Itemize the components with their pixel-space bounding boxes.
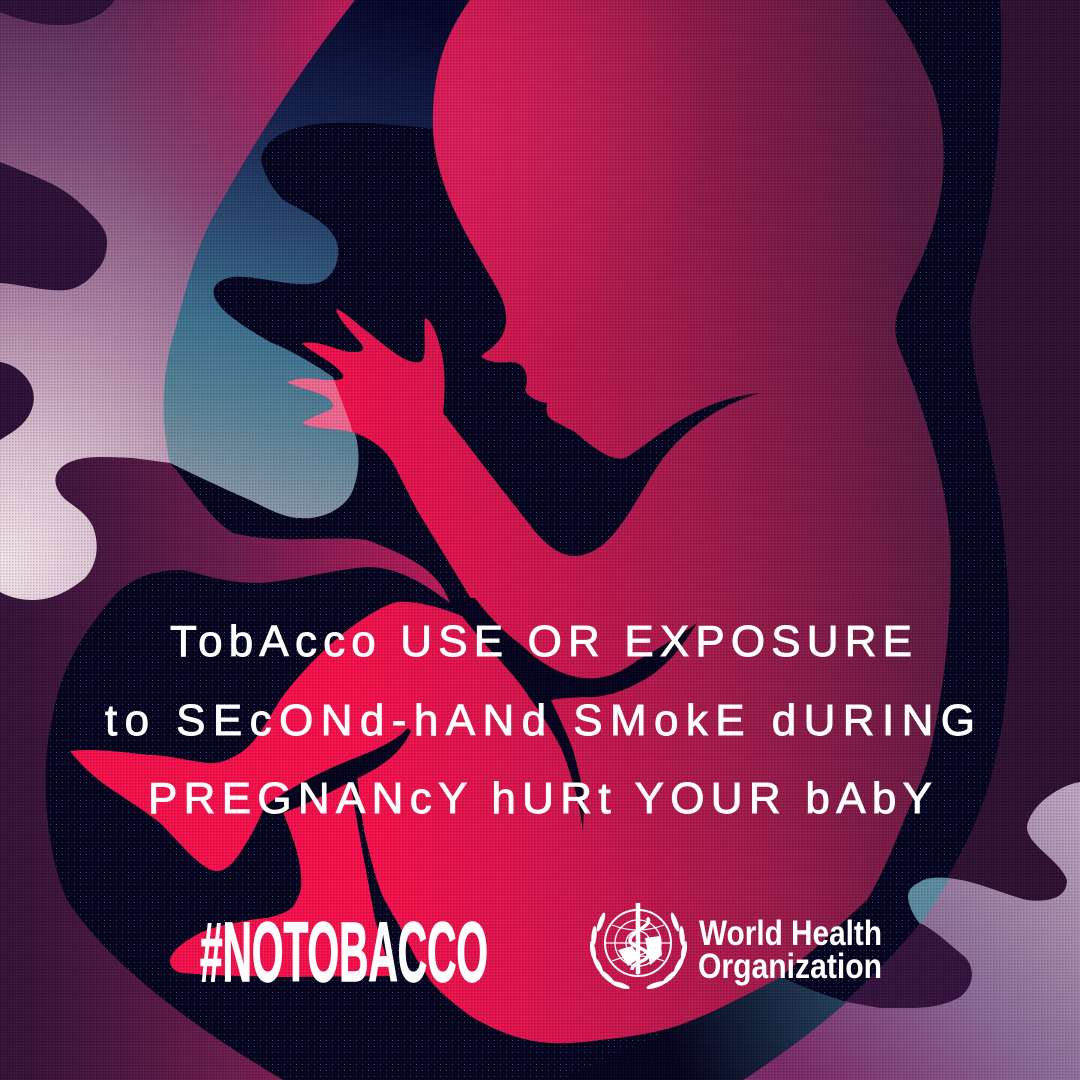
WHO wordmark xyxy=(698,914,882,986)
headline text xyxy=(105,617,975,823)
WHO wordmark: Organization xyxy=(698,947,882,986)
fingers overlapping lens xyxy=(287,378,353,432)
WHO wordmark: World Health xyxy=(699,914,882,953)
headline text: to SEcONd-hANd SMokE dURING xyxy=(105,696,975,745)
poster illustration: #NOTOBACCO xyxy=(200,905,488,999)
dark contour lines on fetus body xyxy=(263,598,697,832)
headline text: TobAcco USE OR EXPOSURE xyxy=(170,617,912,666)
fetus silhouette xyxy=(70,0,951,1043)
teal overlap of smoke on the womb xyxy=(560,878,949,1080)
maroon smoke blob, lower left xyxy=(0,457,460,1080)
blue amniotic lens xyxy=(164,0,470,518)
icon: WHO emblem xyxy=(589,903,688,991)
background smoke blobs, upper left xyxy=(0,0,115,440)
headline text: PREGNANcY hURt YOUR bAbY xyxy=(148,774,932,823)
dark shadow shape in lens xyxy=(214,123,500,420)
lavender smoke, lower right xyxy=(700,782,1080,1080)
WHO logo xyxy=(589,903,882,991)
